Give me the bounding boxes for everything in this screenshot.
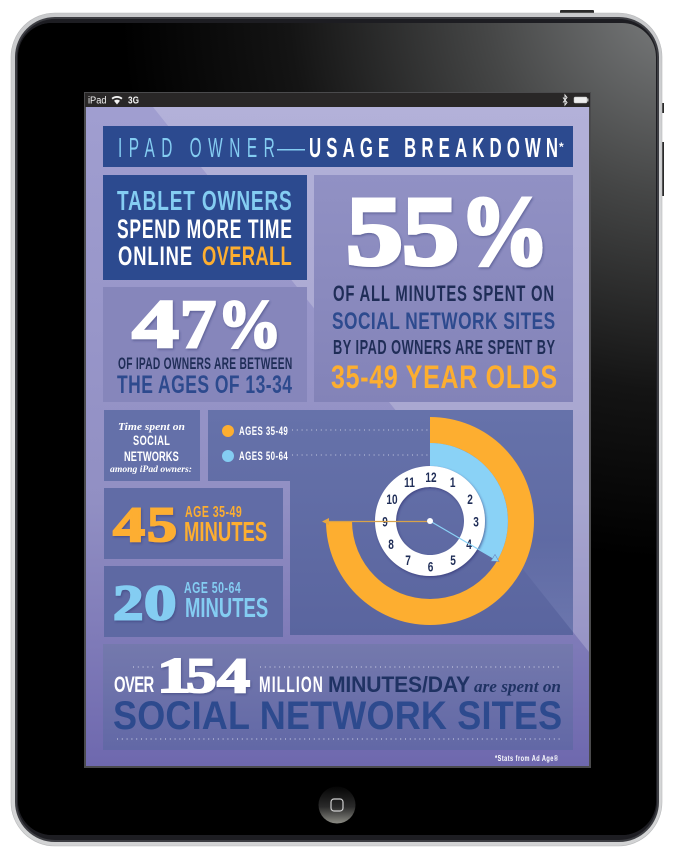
panel: 45 minutes — [104, 488, 283, 559]
panel: 55 percent: BY IPAD OWNERS ARE SPENT BY — [333, 336, 555, 359]
legend: ages 50-64 — [222, 450, 428, 464]
icon: clock face: 7 — [405, 552, 411, 568]
panel: 154 million minutes: are spent on — [474, 677, 561, 696]
panel: 154 million minutes — [103, 644, 573, 750]
panel: 154 million minutes: MINUTES/DAY — [328, 672, 471, 697]
icon: clock face: 8 — [388, 536, 394, 552]
panel: 154 million minutes: MILLION — [259, 672, 323, 697]
icon: clock face: 1 — [450, 474, 456, 490]
icon: clock face — [375, 466, 485, 576]
icon: clock face: 12 — [425, 469, 437, 485]
chart: orange ring 45 minutes — [326, 417, 534, 625]
icon: clock face: 5 — [450, 552, 456, 568]
legend: ages 35-49 — [222, 425, 428, 439]
panel: time spent label: SOCIAL — [133, 432, 170, 449]
panel: 45 minutes: 4 — [113, 497, 145, 552]
panel: 154 million minutes: SOCIAL NETWORK SITES — [113, 694, 562, 738]
panel: title banner — [103, 126, 573, 167]
panel: 55 percent — [314, 175, 573, 402]
panel: 47 percent: 7 — [180, 287, 216, 363]
panel: 154 million minutes: 5 — [186, 648, 217, 704]
panel: 45 minutes: AGE 35-49 — [185, 503, 242, 521]
status bar: iPad — [88, 96, 106, 106]
icon: clock face: 11 — [404, 474, 415, 490]
panel: time spent label — [104, 410, 200, 481]
footnote: *Stats from Ad Age® — [495, 754, 558, 763]
panel: 20 minutes: MINUTES — [185, 593, 268, 624]
panel: 47 percent — [103, 286, 307, 402]
icon: clock face: 4 — [466, 536, 472, 552]
panel: time spent label: among iPad owners: — [110, 465, 192, 475]
panel: 154 million minutes: 1 — [157, 647, 191, 703]
panel: title banner: * — [559, 140, 564, 154]
icon: clock face: 2 — [467, 491, 473, 507]
heading: iPad owner: IPAD OWNER — [118, 132, 275, 163]
icon: clock face: 6 — [428, 559, 433, 575]
panel: 20 minutes: AGE 50-64 — [184, 579, 241, 597]
status bar: 3G — [128, 96, 139, 106]
panel: time spent label: NETWORKS — [124, 448, 179, 465]
panel: 47 percent: OF IPAD OWNERS ARE BETWEEN — [118, 355, 292, 373]
panel: 45 minutes: 5 — [147, 497, 177, 552]
panel: 47 percent: % — [218, 287, 282, 363]
panel: tablet owners: OVERALL — [202, 240, 292, 271]
icon: clock face: 10 — [386, 491, 398, 507]
panel: clock chart — [208, 410, 573, 635]
panel: tablet owners: TABLET OWNERS — [117, 185, 292, 217]
panel: 20 minutes: 0 — [144, 574, 176, 630]
panel: 47 percent: 4 — [132, 286, 179, 362]
panel: title banner: USAGE BREAKDOWN — [309, 132, 558, 163]
panel: tablet owners: ONLINE — [118, 240, 192, 271]
icon: home button — [318, 786, 356, 824]
panel: 45 minutes: MINUTES — [184, 517, 267, 548]
chart: blue ring 20 minutes — [430, 443, 508, 560]
arrow: orange clock hand — [322, 518, 430, 525]
panel: 55 percent: 5 — [402, 177, 459, 286]
panel: 154 million minutes: 4 — [217, 648, 250, 703]
icon: clock face: 9 — [382, 514, 388, 530]
panel: 55 percent: SOCIAL NETWORK SITES — [332, 308, 555, 335]
panel: 20 minutes: 2 — [113, 575, 144, 631]
panel: 154 million minutes: OVER — [114, 673, 154, 698]
legend: ages 50-64: AGES 50-64 — [239, 451, 288, 464]
icon: clock face: 3 — [473, 514, 479, 530]
panel: time spent label: Time spent on — [118, 422, 185, 433]
panel: tablet owners — [103, 175, 307, 280]
panel: 47 percent: THE AGES OF 13-34 — [117, 370, 292, 399]
panel: tablet owners: SPEND MORE TIME — [117, 214, 292, 244]
legend: ages 35-49: AGES 35-49 — [239, 426, 288, 439]
panel: 55 percent: 5 — [346, 177, 403, 286]
screen background — [86, 107, 589, 766]
arrow: blue clock hand — [427, 518, 499, 562]
panel: 55 percent: % — [460, 177, 549, 286]
panel: 20 minutes — [104, 566, 283, 637]
status bar — [84, 92, 591, 768]
panel: 55 percent: OF ALL MINUTES SPENT ON — [333, 282, 554, 307]
panel: 55 percent: 35-49 YEAR OLDS — [331, 360, 557, 396]
